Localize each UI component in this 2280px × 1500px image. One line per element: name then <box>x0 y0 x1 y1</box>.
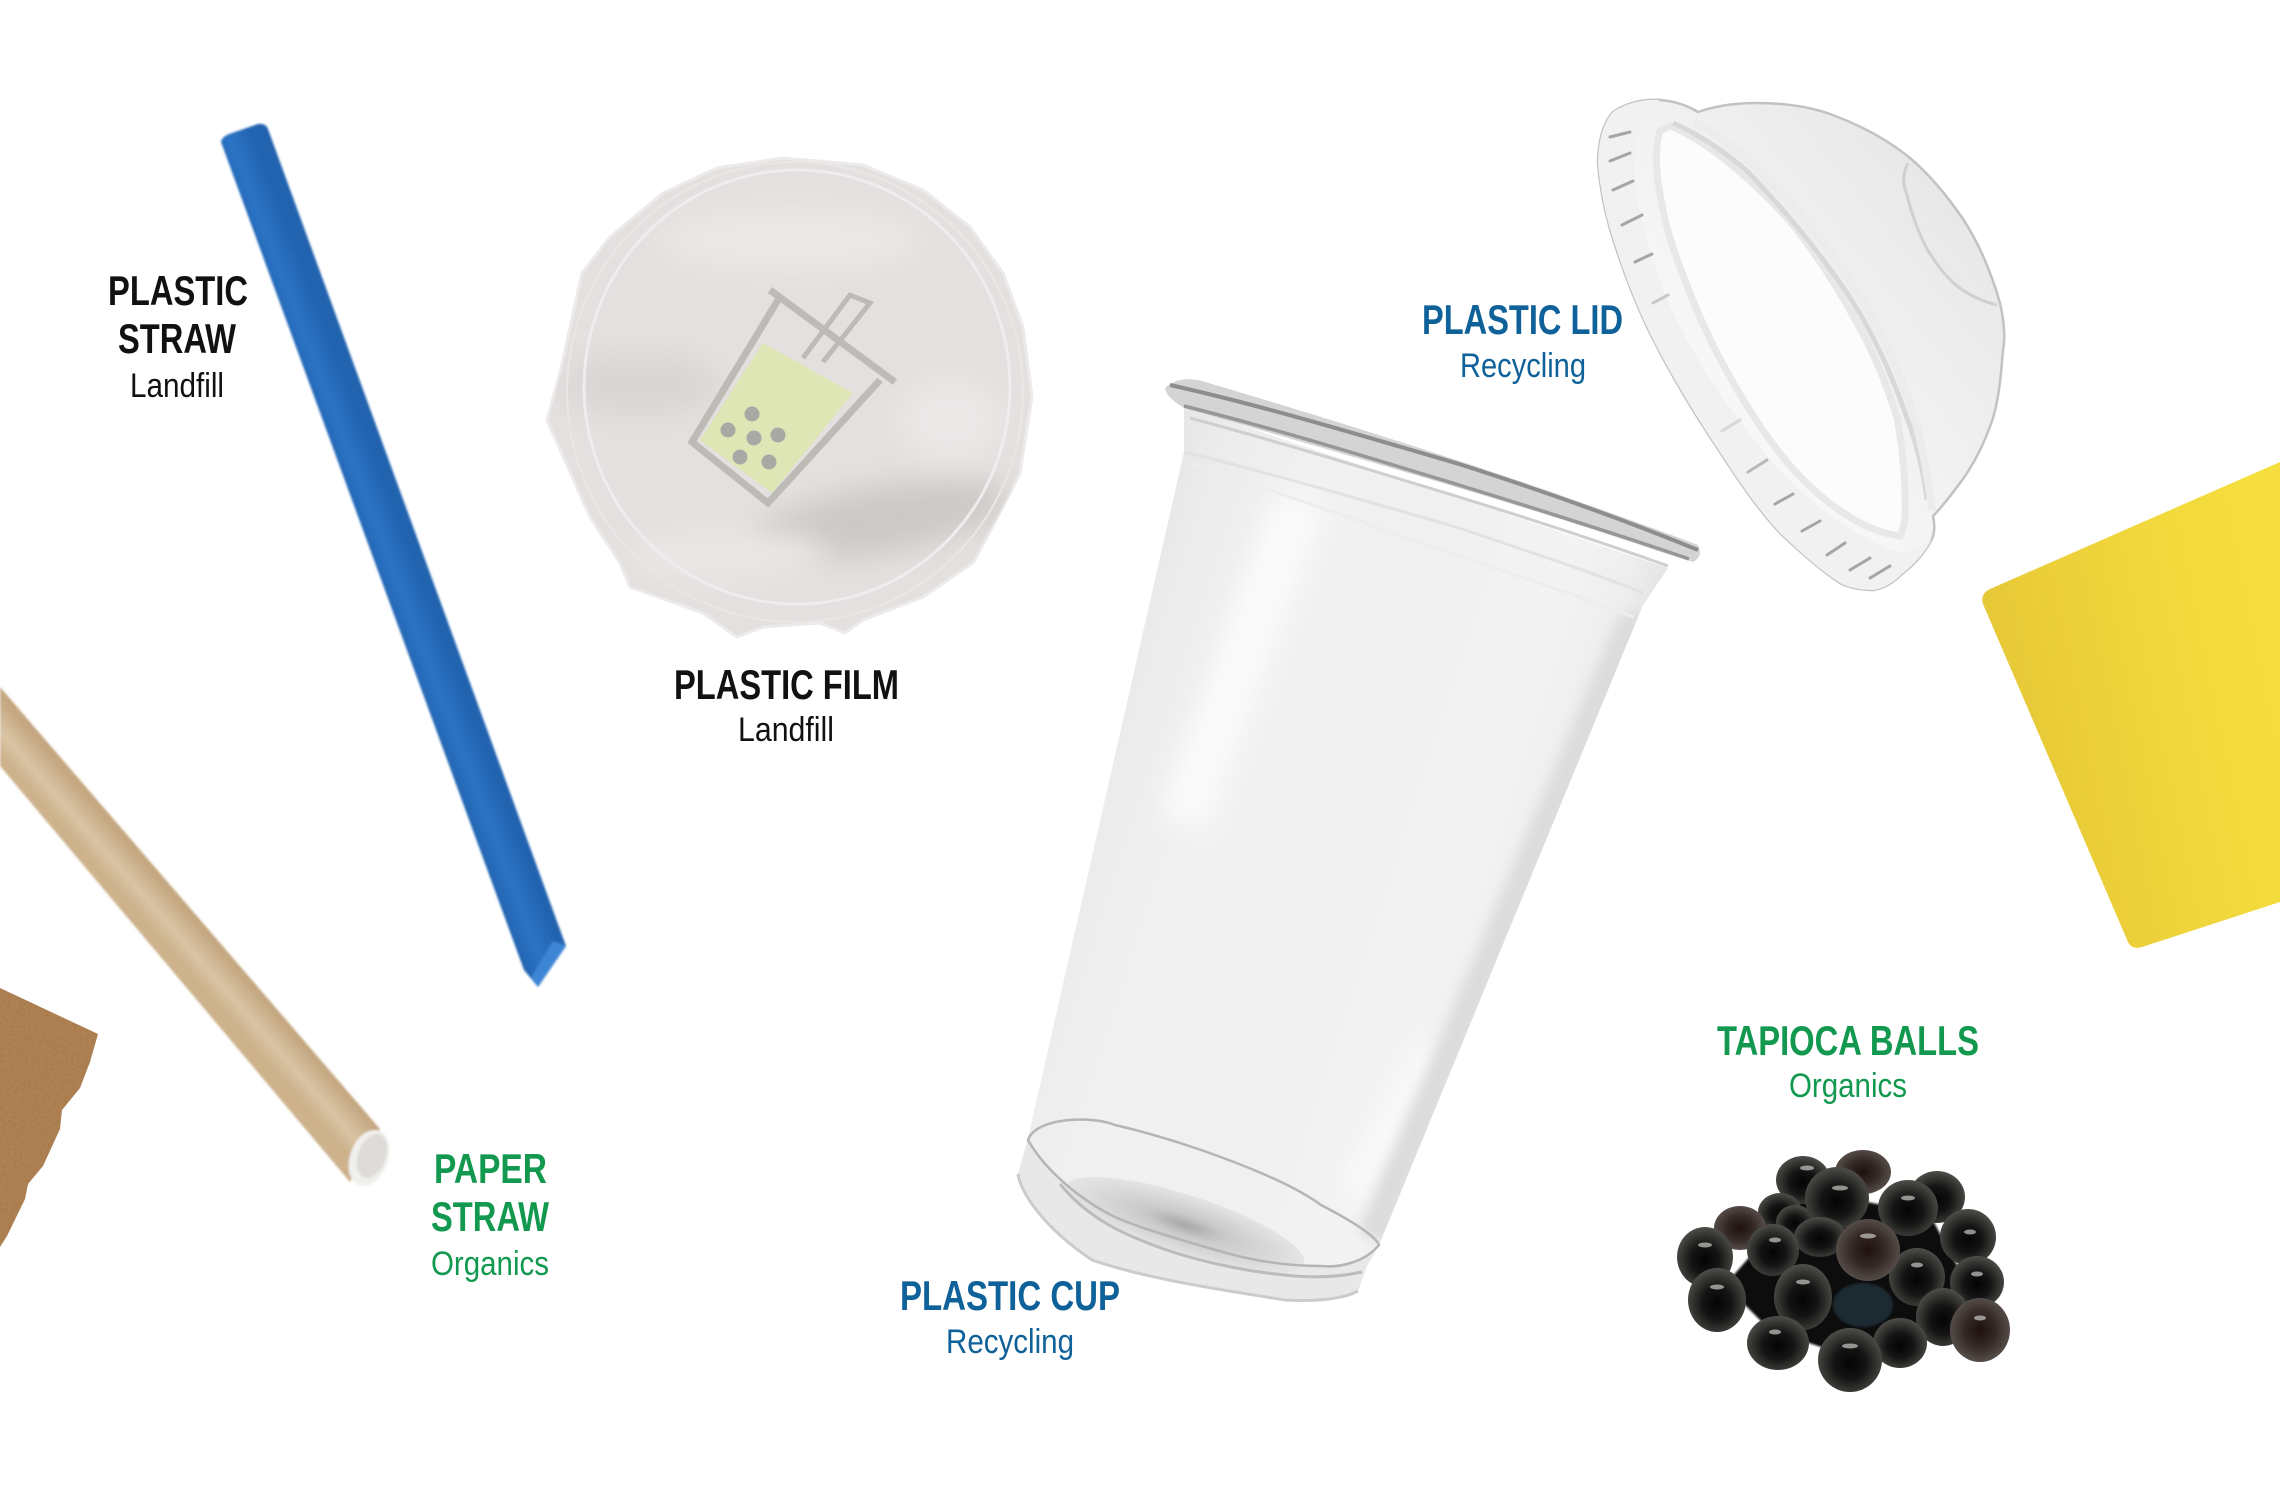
icon: printed bubble tea cup <box>692 290 895 503</box>
lid sip indent <box>1904 163 1997 305</box>
label: plastic lid: Recycling <box>1460 347 1586 385</box>
label: plastic cup: Recycling <box>946 1323 1074 1361</box>
label: plastic lid: PLASTIC LID <box>1422 296 1623 343</box>
label: plastic lid <box>1422 296 1623 385</box>
label: plastic straw <box>108 267 248 405</box>
cup base <box>1018 1120 1379 1301</box>
cup highlights <box>1160 490 1650 1245</box>
icon: brown cardboard sleeve <box>0 988 98 1247</box>
lid flange band <box>1598 100 1932 590</box>
label: plastic cup: PLASTIC CUP <box>900 1272 1120 1319</box>
lid rim band <box>1673 123 1927 500</box>
lid dome interior <box>1656 126 1905 536</box>
cup neck bands <box>1184 452 1643 617</box>
label: tapioca balls: Organics <box>1789 1067 1907 1105</box>
cup body <box>1018 406 1668 1301</box>
icon: blue plastic straw <box>221 124 566 987</box>
icon: paper straw <box>0 687 397 1192</box>
label: plastic film: PLASTIC FILM <box>674 661 899 708</box>
icon: yellow box <box>1982 462 2280 948</box>
icon: plastic cup <box>1018 379 1700 1301</box>
label: tapioca balls <box>1717 1017 1979 1105</box>
label: plastic straw: PLASTIC <box>108 267 248 314</box>
icon: plastic film seal <box>547 158 1032 637</box>
cup rim <box>1165 379 1700 566</box>
label: plastic straw: Landfill <box>130 367 224 405</box>
ball highlights <box>1698 1166 1986 1348</box>
icon: plastic dome lid <box>1598 100 2004 590</box>
label: plastic film: Landfill <box>738 711 834 749</box>
label: tapioca balls: TAPIOCA BALLS <box>1717 1017 1979 1064</box>
label: paper straw: STRAW <box>431 1193 549 1240</box>
label: plastic straw: STRAW <box>118 315 236 362</box>
label: plastic cup <box>900 1272 1120 1361</box>
film creases <box>560 208 1014 579</box>
icon: tapioca balls <box>1677 1150 2010 1392</box>
lid outline <box>1598 100 2004 590</box>
label: paper straw <box>431 1145 549 1283</box>
label: paper straw: Organics <box>431 1245 549 1283</box>
lid flange ticks <box>1610 132 1890 578</box>
label: plastic film <box>674 661 899 749</box>
label: paper straw: PAPER <box>434 1145 547 1192</box>
